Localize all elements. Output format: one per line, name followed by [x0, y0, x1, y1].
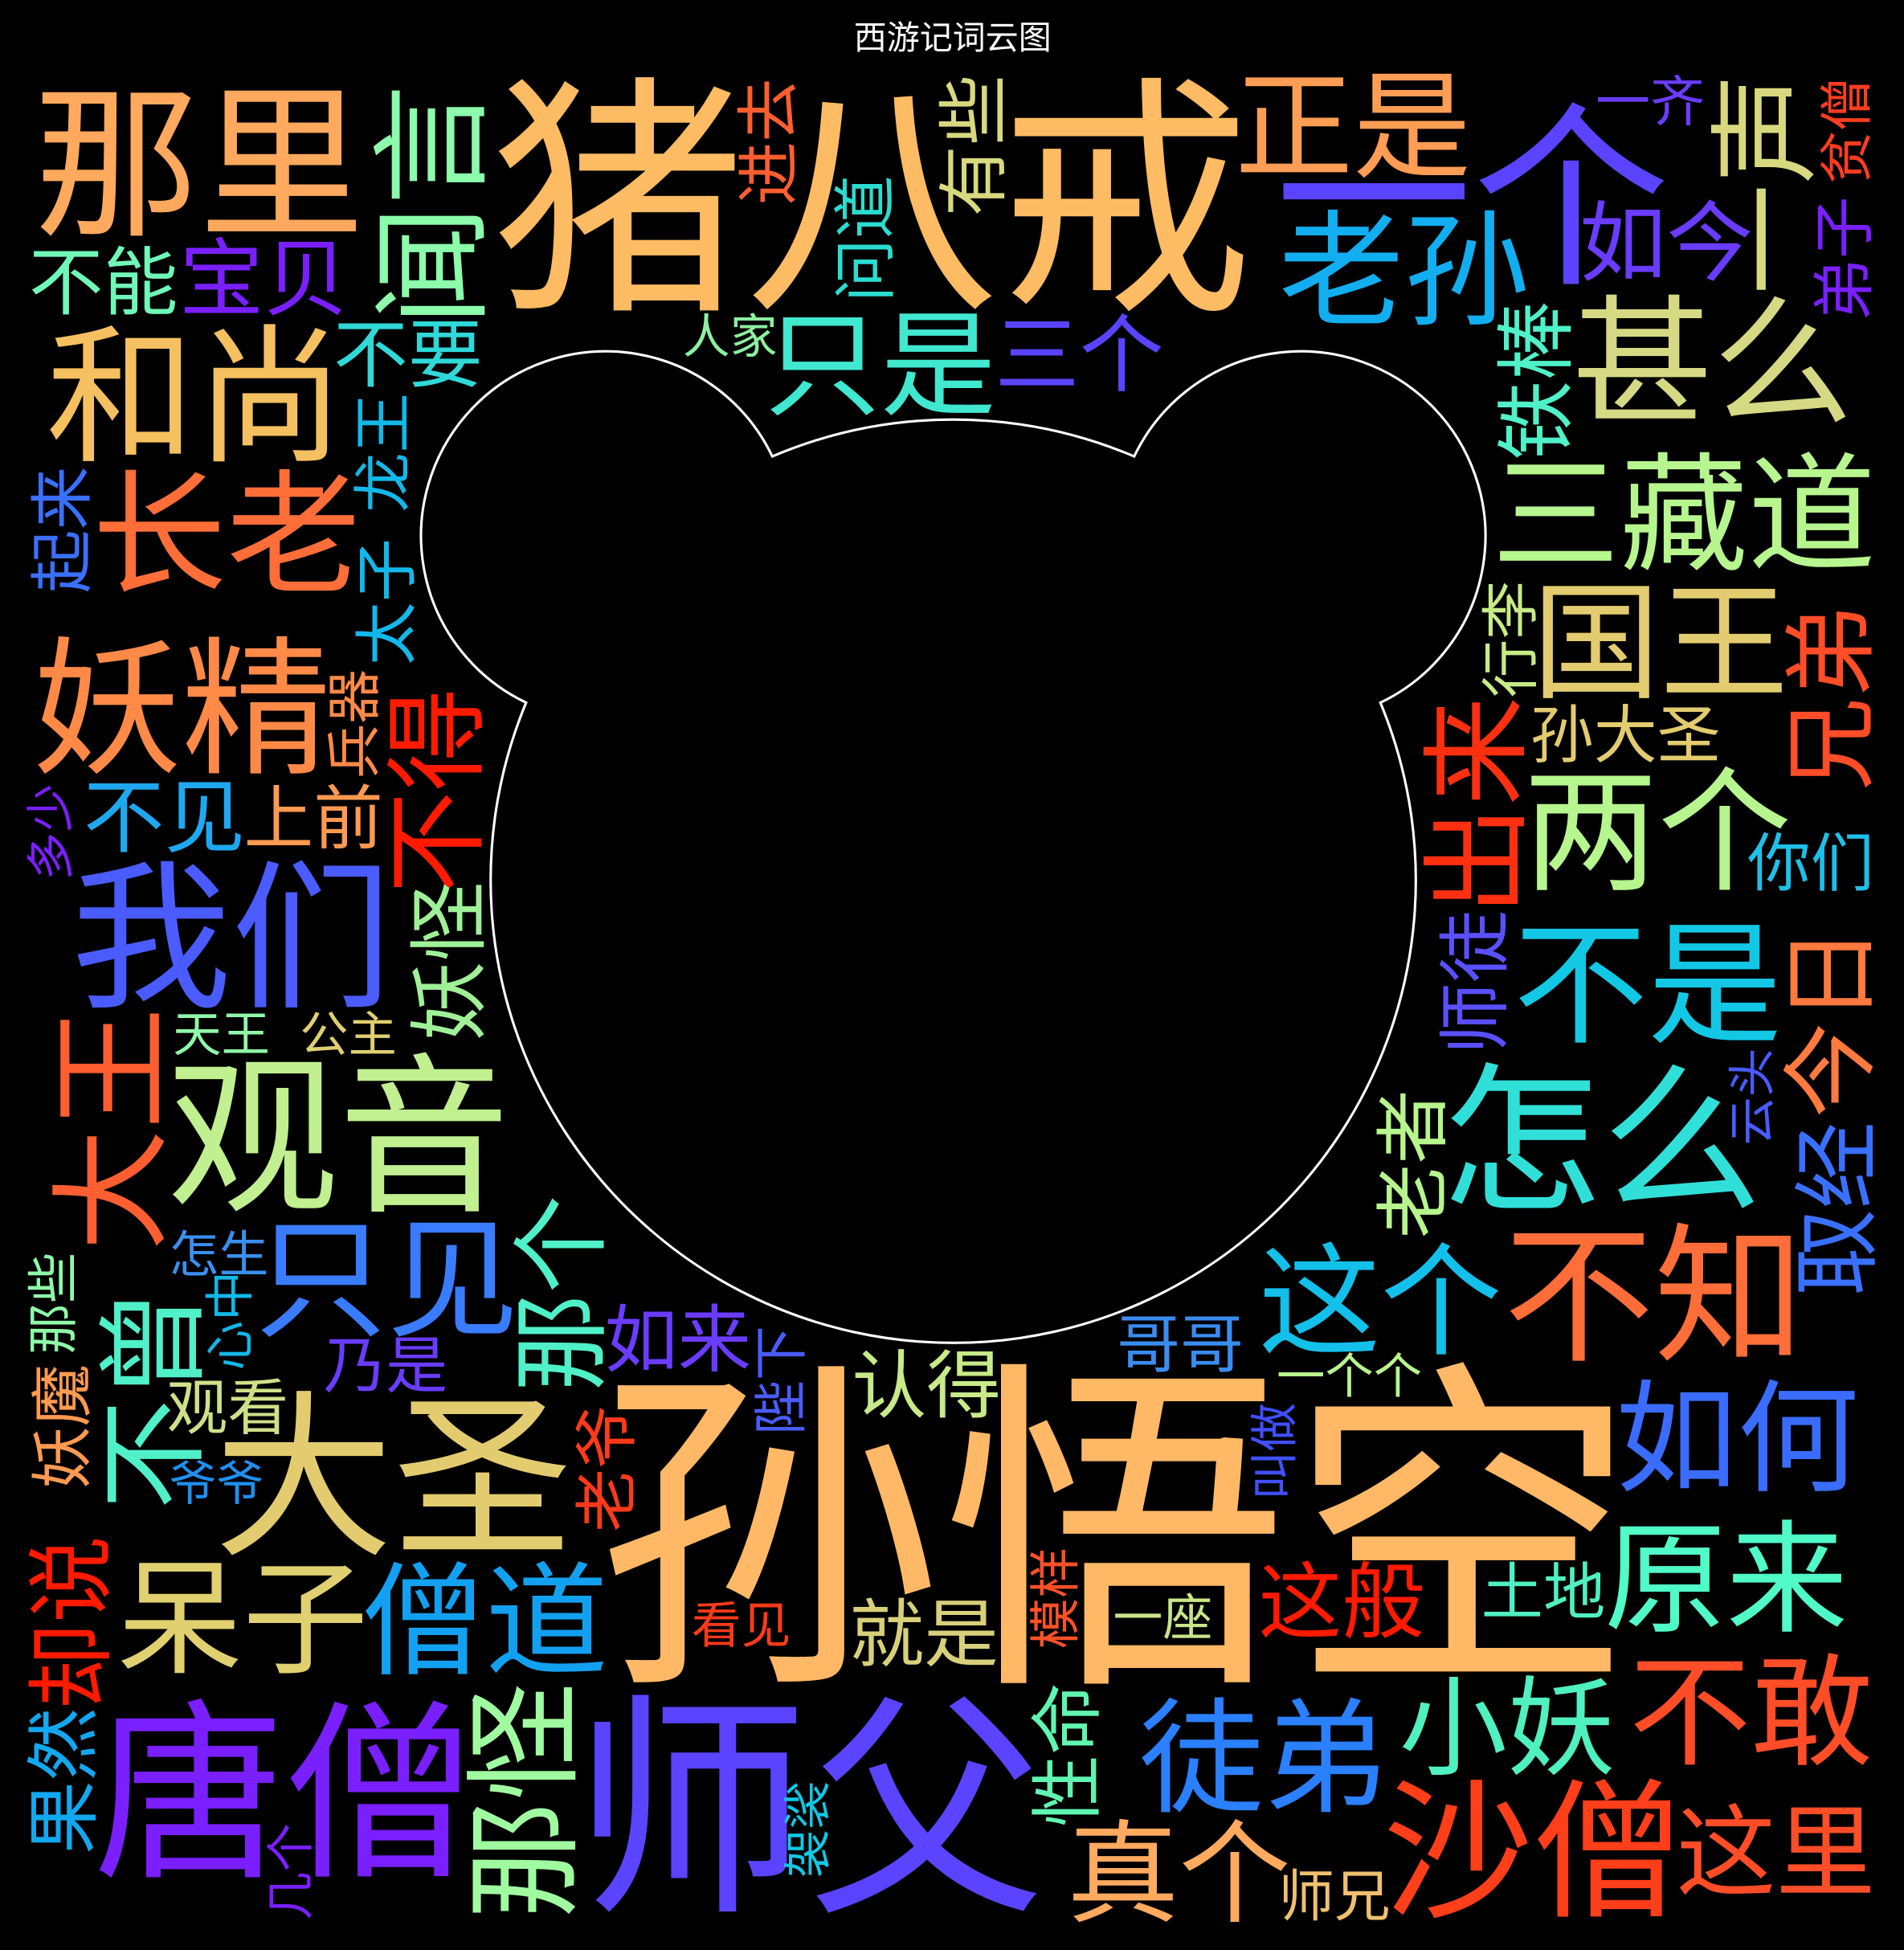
- word: 我们: 我们: [71, 850, 392, 1029]
- word: 兵器: 兵器: [325, 669, 386, 779]
- word: 你们: 你们: [1747, 828, 1874, 899]
- word: 如来: 如来: [604, 1299, 751, 1381]
- word: 有些: 有些: [934, 75, 1014, 216]
- word: 进去: 进去: [733, 79, 804, 205]
- word: 一座: 一座: [1113, 1591, 1212, 1646]
- word: 老者: 老者: [1371, 1089, 1455, 1239]
- word: 却说: 却说: [23, 1536, 121, 1710]
- word: 小妖: 小妖: [1399, 1668, 1616, 1789]
- word: 这般: 这般: [1259, 1556, 1425, 1649]
- word: 不要: 不要: [333, 313, 483, 397]
- word: 僧道: 僧道: [362, 1554, 608, 1691]
- word: 不知: 不知: [1503, 1212, 1804, 1381]
- word: 弟子: 弟子: [1811, 197, 1880, 321]
- word: 多少: 多少: [23, 783, 78, 881]
- word: 袈裟: 袈裟: [781, 1780, 836, 1878]
- word: 公主: 公主: [300, 1008, 397, 1062]
- word: 观音: 观音: [167, 1044, 510, 1235]
- word: 只见: 只见: [255, 1206, 519, 1354]
- word: 起来: 起来: [27, 466, 98, 593]
- word: 妖魔: 妖魔: [29, 1364, 98, 1489]
- word: 不是: 不是: [1514, 912, 1782, 1061]
- word: 只是: 只是: [765, 301, 996, 431]
- word: 贫僧: 贫僧: [1818, 77, 1877, 184]
- word: 几个: 几个: [264, 1823, 318, 1920]
- word: 怎么: 怎么: [1441, 1053, 1762, 1232]
- word: 那里: 那里: [34, 73, 365, 258]
- word: 不曾: 不曾: [93, 1289, 217, 1510]
- word: 不敢: 不敢: [1629, 1645, 1873, 1781]
- word: 真个: 真个: [1067, 1812, 1291, 1937]
- word: 那怪: 那怪: [460, 1682, 592, 1919]
- word: 两个: 两个: [1523, 758, 1792, 908]
- word: 三藏道: 三藏道: [1492, 444, 1876, 587]
- word: 大圣: 大圣: [214, 1380, 572, 1580]
- word: 心中: 心中: [203, 1271, 259, 1371]
- word: 妖精: 妖精: [32, 628, 331, 794]
- word: 陛下: 陛下: [751, 1326, 812, 1435]
- word: 三个: 三个: [995, 309, 1164, 403]
- word: 那些: 那些: [27, 1253, 83, 1355]
- word: 出来: 出来: [1416, 697, 1538, 915]
- word: 性命: 性命: [1028, 1682, 1109, 1827]
- word: 唐僧: 唐僧: [93, 1688, 476, 1903]
- word: 天王: 天王: [173, 1008, 270, 1062]
- word: 观看: 观看: [167, 1375, 288, 1443]
- word: 铁棒: 铁棒: [1492, 301, 1581, 460]
- title: 西游记词云图: [854, 19, 1052, 56]
- word: 如今: 如今: [1579, 194, 1754, 292]
- word: 兄弟: 兄弟: [1779, 604, 1884, 791]
- word: 行李: 行李: [1479, 581, 1544, 697]
- word: 不见: 不见: [84, 774, 245, 864]
- word: 今日: 今日: [1779, 926, 1886, 1118]
- word: 云头: 云头: [1725, 1049, 1779, 1146]
- word: 和尚: 和尚: [46, 315, 345, 481]
- word: 取经: 取经: [1789, 1122, 1886, 1296]
- word: 猪八戒: 猪八戒: [492, 60, 1252, 344]
- word: 太子: 太子: [352, 538, 423, 665]
- word: 哥哥: 哥哥: [1117, 1310, 1244, 1380]
- word: 老爷: 老爷: [572, 1405, 643, 1532]
- word: 上前: 上前: [244, 781, 383, 858]
- word: 宝贝: 宝贝: [179, 233, 349, 327]
- word: 问道: 问道: [831, 175, 901, 302]
- word: 呆子: 呆子: [117, 1550, 368, 1690]
- word: 乃是: 乃是: [324, 1332, 447, 1401]
- word: 大王: 大王: [45, 1008, 181, 1251]
- word: 孙大圣: 孙大圣: [1530, 700, 1721, 771]
- word: 师徒: 师徒: [1436, 910, 1517, 1055]
- word: 怎生: 怎生: [170, 1228, 268, 1283]
- word: 国王: 国王: [1532, 572, 1788, 715]
- word: 一声: 一声: [1705, 73, 1828, 295]
- word: 龙王: 龙王: [350, 393, 417, 513]
- word: 原来: 原来: [1604, 1513, 1848, 1649]
- word: 爷爷: 爷爷: [170, 1458, 264, 1511]
- word: 一个个: 一个个: [1277, 1349, 1422, 1404]
- word: 一齐: 一齐: [1596, 72, 1705, 133]
- word: 人家: 人家: [683, 312, 778, 364]
- word: 甚么: 甚么: [1572, 287, 1853, 444]
- word: 正是: 正是: [1235, 62, 1471, 194]
- word: 孙悟空: 孙悟空: [595, 1342, 1636, 1730]
- word: 认得: 认得: [852, 1344, 1001, 1428]
- word: 长老: 长老: [92, 461, 361, 611]
- word: 徒弟: 徒弟: [1139, 1690, 1387, 1829]
- bear silhouette outline: [421, 351, 1485, 1343]
- word: 如何: 如何: [1616, 1372, 1859, 1508]
- word: 土地: 土地: [1481, 1558, 1605, 1627]
- word: 闻言: 闻言: [366, 84, 501, 326]
- word: 师兄: 师兄: [1278, 1866, 1391, 1928]
- word: 看见: 看见: [692, 1598, 791, 1654]
- word: 妖怪: 妖怪: [405, 881, 494, 1041]
- word: 一个: 一个: [1275, 90, 1670, 311]
- word: 这里: 这里: [1677, 1798, 1875, 1909]
- word: 就是: 就是: [849, 1593, 999, 1677]
- word: 沙僧: 沙僧: [1383, 1768, 1684, 1937]
- word: 不得: 不得: [381, 688, 496, 894]
- word: 不能: 不能: [29, 241, 178, 325]
- word: 师父: 师父: [572, 1680, 1044, 1944]
- word: 那个: 那个: [507, 1195, 617, 1392]
- word: 果然: 果然: [23, 1707, 105, 1854]
- word: 叫做: 叫做: [1247, 1403, 1301, 1500]
- word: 模样: 模样: [1028, 1547, 1085, 1649]
- word: 老孙: 老孙: [1278, 202, 1530, 342]
- word: 这个: 这个: [1259, 1236, 1502, 1372]
